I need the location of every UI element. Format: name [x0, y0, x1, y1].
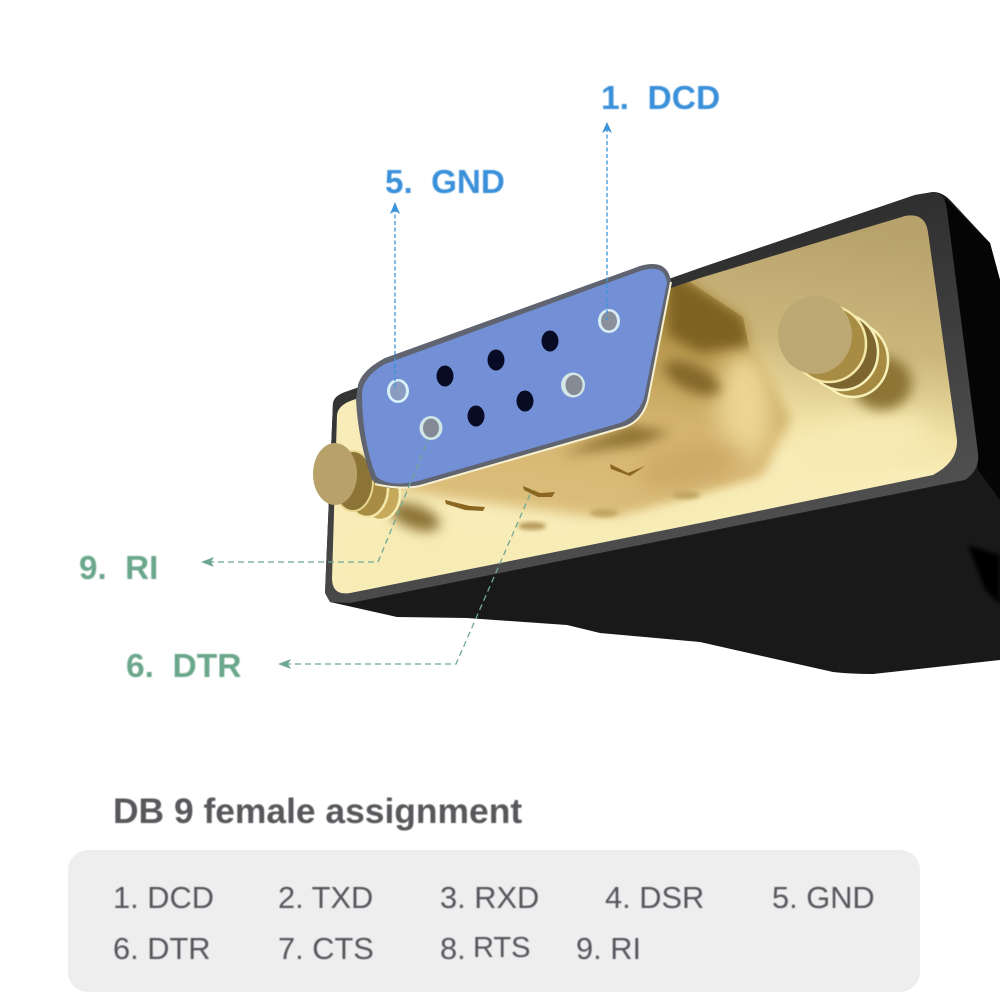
- black connector body: [325, 192, 1000, 674]
- leader: 9 RI: [201, 440, 428, 567]
- lit shell highlight: [717, 350, 773, 460]
- leader: 1 DCD: [602, 122, 612, 320]
- shell shadow top: [668, 270, 750, 352]
- hollow pin 1: [598, 309, 620, 333]
- right screw: [778, 296, 912, 410]
- left screw: [313, 443, 444, 537]
- pin holes: [387, 309, 620, 440]
- hollow pin 5: [387, 379, 409, 403]
- row 1: 1. DCD: [113, 880, 214, 915]
- dark pin 2: [542, 330, 558, 352]
- plate highlight: [350, 476, 767, 593]
- label: 1 DCD: 1. DCD: [601, 80, 720, 117]
- row 1: 3. RXD: [440, 880, 539, 915]
- leader: 6 DTR: [278, 490, 532, 669]
- hollow pin 9: [420, 416, 442, 440]
- dark pin 8: [468, 406, 484, 426]
- row 2: 8.: [440, 931, 466, 966]
- plate and shell shading: [345, 268, 934, 593]
- gold mounting plate: [332, 215, 957, 593]
- hollow pin 6: [561, 372, 585, 398]
- body side recess: [968, 545, 1000, 605]
- row 2: 6. DTR: [113, 931, 211, 966]
- row 1: 2. TXD: [278, 880, 373, 915]
- label: 9 RI: 9. RI: [79, 550, 158, 587]
- gold D-shell: [380, 268, 790, 520]
- leader: 5 GND: [390, 202, 400, 390]
- shell shadow mid: [659, 354, 725, 402]
- blue face rim: [356, 264, 671, 489]
- dark pin 7: [516, 390, 534, 412]
- row 2: 7. CTS: [278, 931, 374, 966]
- heading: DB 9 female assignment: [113, 791, 522, 831]
- row 2: RTS: [473, 932, 530, 964]
- dark pin 3: [488, 350, 504, 370]
- row 2: 9. RI: [576, 931, 641, 966]
- row 1: [113, 880, 875, 915]
- plate lower right highlight: [830, 411, 924, 446]
- shell shadow lower: [643, 438, 744, 488]
- shell shadow under face: [560, 425, 672, 455]
- panel: pin assignment list: [68, 850, 920, 992]
- label: 5 GND: 5. GND: [385, 164, 505, 201]
- blue face: [362, 269, 667, 484]
- connector illustration: [313, 192, 1000, 674]
- shell slots: [445, 464, 700, 530]
- label: 6 DTR: 6. DTR: [126, 648, 241, 685]
- right black side: [945, 198, 1000, 500]
- grey front frame: [325, 192, 978, 603]
- row 1: 5. GND: [772, 880, 875, 915]
- row 2: [113, 931, 641, 966]
- dark pin 4: [436, 366, 454, 386]
- row 1: 4. DSR: [605, 880, 704, 915]
